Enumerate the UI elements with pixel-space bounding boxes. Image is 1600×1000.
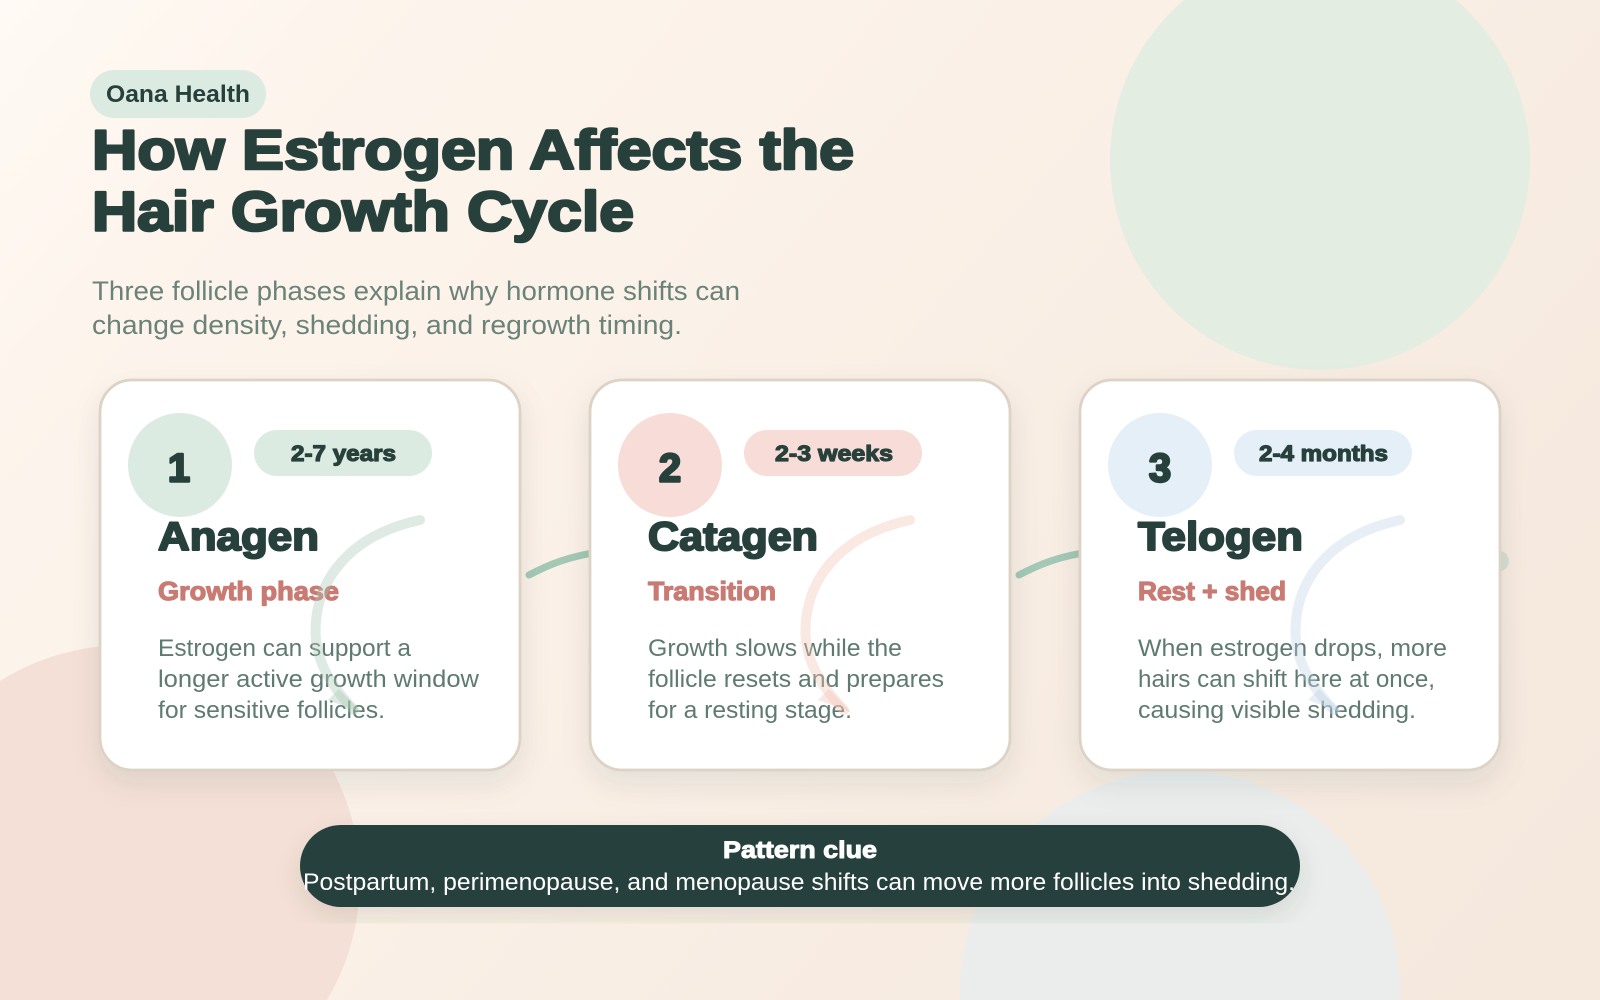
panel: catagen [590,380,1010,770]
description [158,635,480,724]
description [648,635,944,724]
callout: pattern clue [300,825,1300,907]
connector: anagen to catagen [529,552,600,575]
description: Estrogen can support a [158,635,412,662]
number badge 1: 1 [168,446,190,490]
description: hairs can shift here at once, [1138,666,1435,693]
description: for sensitive follicles. [158,697,385,724]
description: follicle resets and prepares [648,666,944,693]
duration pill: 2-7 years [291,441,396,466]
number badge 3: 3 [1149,446,1171,490]
brand chip [90,70,266,118]
icon: curved arrow [805,520,910,713]
duration pill [254,430,432,476]
phase label: Transition [648,576,776,606]
icon: curved arrow [1295,520,1400,713]
callout text: Postpartum, perimenopause, and menopause shifts can move more follicles into shedding. [303,869,1295,896]
callout heading: Pattern clue [723,837,877,864]
duration pill: 2-4 months [1259,441,1388,466]
number badge 2 [618,413,722,517]
duration pill [1234,430,1412,476]
phase name: Telogen [1138,515,1303,559]
connector: catagen to telogen [1019,552,1090,575]
card background [100,380,520,770]
subtitle: Three follicle phases explain why hormone shifts can [92,276,740,306]
phase name: Anagen [158,515,319,559]
subtitle [92,276,740,340]
title: Hair Growth Cycle [92,180,634,242]
panel: telogen [1080,380,1500,770]
number badge 3 [1108,413,1212,517]
description: Growth slows while the [648,635,902,662]
description: When estrogen drops, more [1138,635,1447,662]
phase label: Rest + shed [1138,576,1286,606]
connector tail: after telogen [1488,550,1509,572]
description: causing visible shedding. [1138,697,1416,724]
title [92,118,854,242]
icon: curved arrow [315,520,420,713]
subtitle: change density, shedding, and regrowth timing. [92,310,682,340]
title: How Estrogen Affects the [92,118,854,181]
description: for a resting stage. [648,697,852,724]
description: longer active growth window [158,666,480,693]
panel: anagen [100,380,520,770]
card background [590,380,1010,770]
brand chip: Oana Health [106,81,250,108]
number badge 1 [128,413,232,517]
duration pill [744,430,922,476]
number badge 2: 2 [659,446,681,490]
background circle: green [1110,0,1530,370]
phase name: Catagen [648,515,818,559]
duration pill: 2-3 weeks [775,441,893,466]
background circle: peach [0,645,360,1000]
card background [1080,380,1500,770]
phase label: Growth phase [158,576,339,606]
description [1138,635,1447,724]
background circle: blue-grey [960,771,1400,1000]
